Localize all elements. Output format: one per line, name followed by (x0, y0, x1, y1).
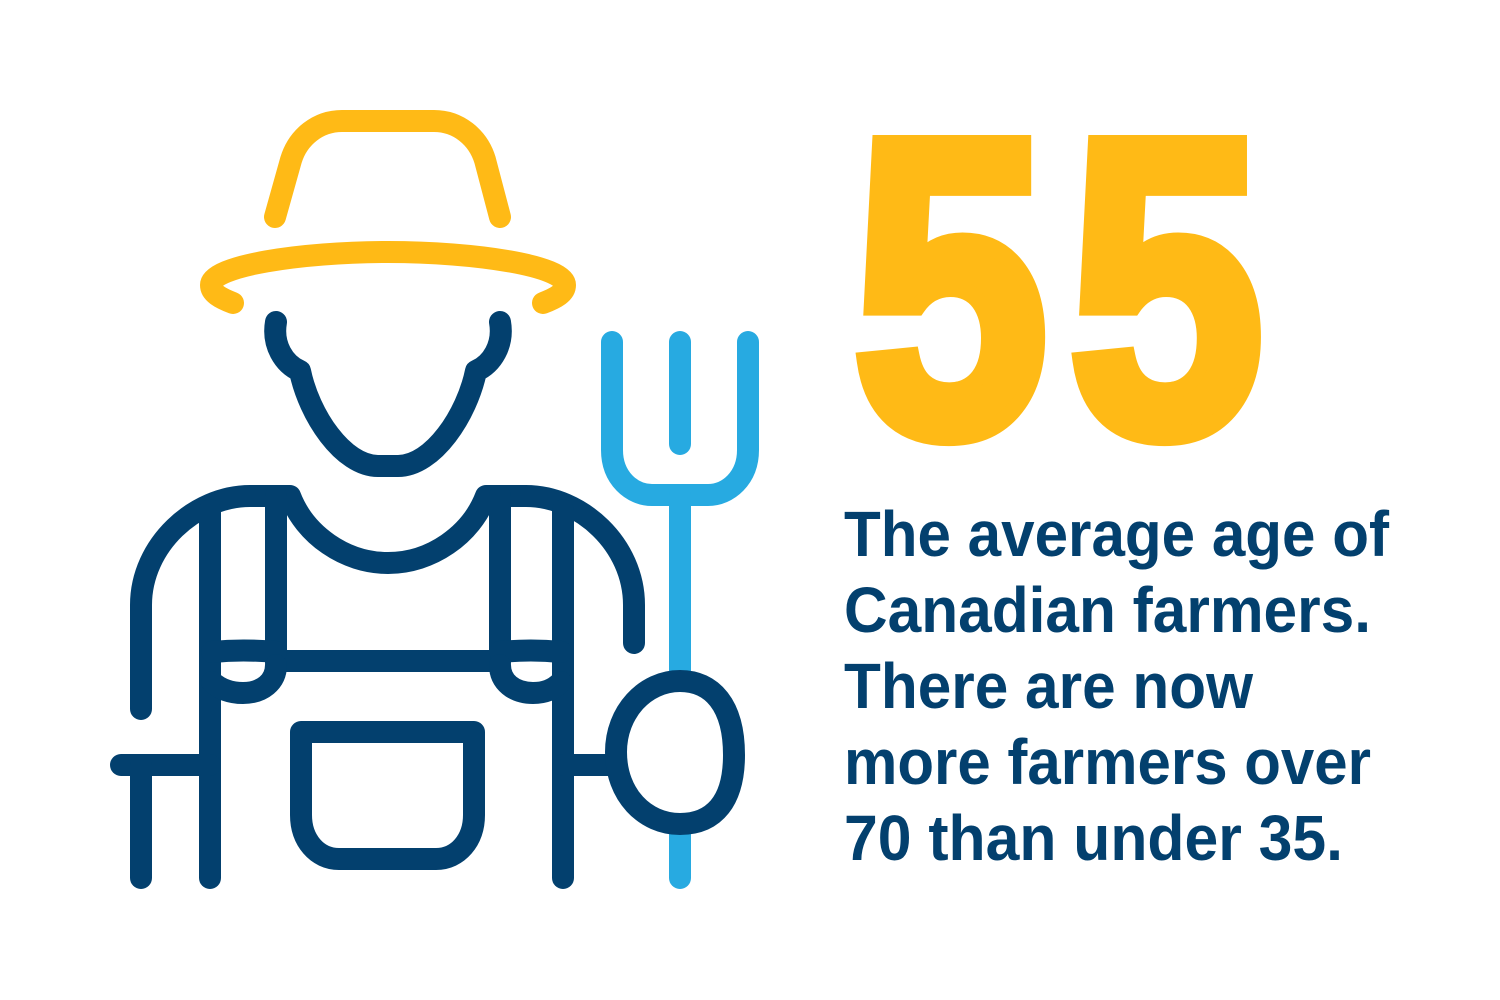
icon: stool (121, 765, 210, 878)
icon: overalls (210, 496, 563, 878)
big number: 55: 55 (854, 53, 1263, 522)
text block: description (844, 498, 1390, 874)
text block: description: Canadian farmers. (844, 574, 1371, 646)
text block: description: The average age of (844, 498, 1390, 570)
text block: description: There are now (844, 650, 1253, 722)
icon: hand gripping fork (563, 681, 734, 824)
icon: pitchfork (612, 342, 748, 878)
icon: face outline (275, 322, 501, 466)
text block: description: more farmers over (844, 726, 1371, 798)
icon: hat (211, 121, 565, 303)
icon: shirt and arms (141, 496, 634, 709)
icon: farmer with pitchfork (121, 121, 748, 878)
text block: description: 70 than under 35. (844, 802, 1343, 874)
